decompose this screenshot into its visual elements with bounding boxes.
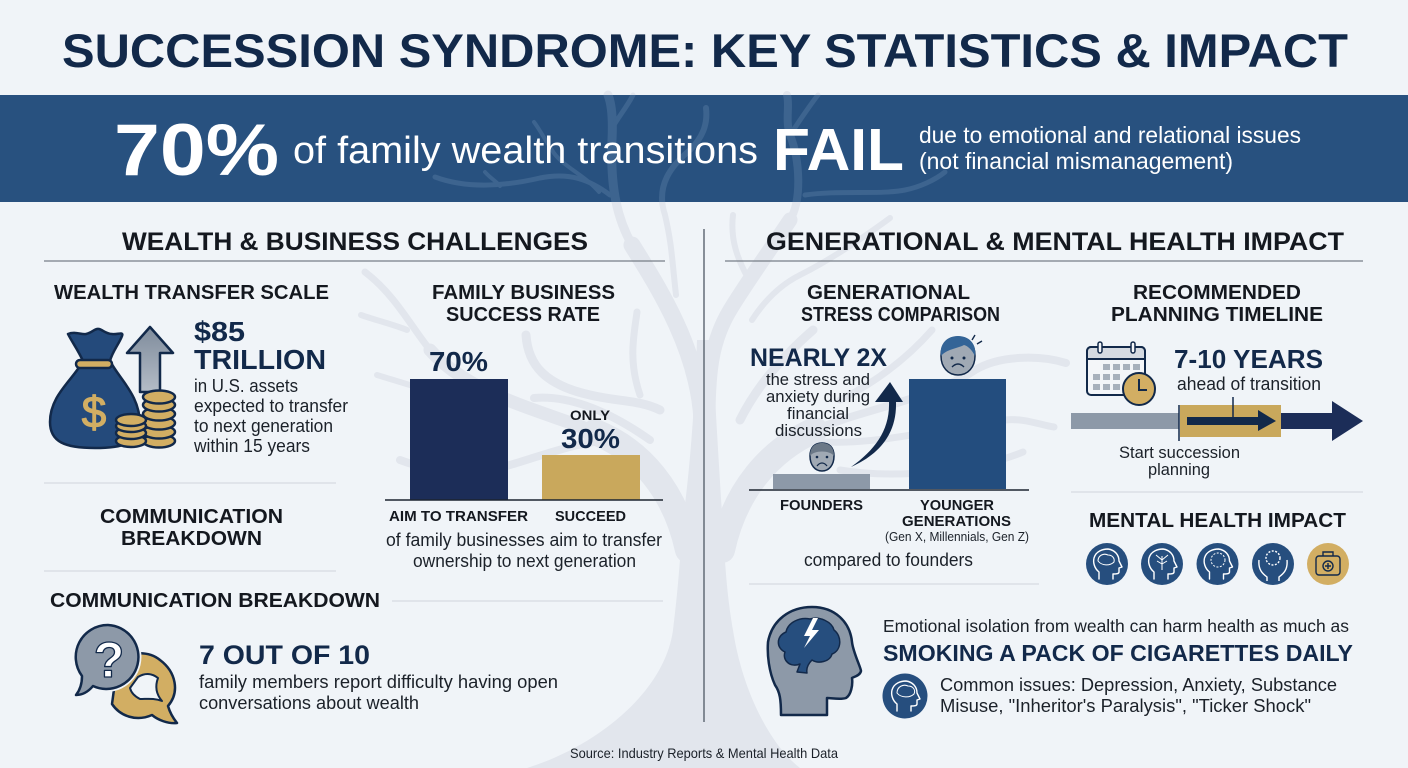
text: ahead of transition: ahead of transition xyxy=(1177,374,1321,394)
banner: headline statistic: of family wealth transitions xyxy=(293,130,758,172)
bar chart: success rate: SUCCEED xyxy=(555,508,626,525)
text: common issues xyxy=(940,675,1337,716)
text: stress description: discussions xyxy=(775,421,862,440)
heading: communication breakdown: COMMUNICATION BREAKDOWN xyxy=(50,590,380,612)
text: start succession planning: planning xyxy=(1148,460,1210,479)
statistic: 7 out of 10: 7 OUT OF 10 xyxy=(199,640,370,670)
banner: headline statistic: FAIL xyxy=(773,117,904,183)
text: communication description: family members report difficulty having open xyxy=(199,672,558,692)
text: chart caption xyxy=(386,530,662,571)
icon: calendar and clock xyxy=(1087,342,1155,405)
text: emotional isolation: Emotional isolation from wealth can harm health as much as xyxy=(883,616,1349,636)
heading: wealth transfer scale: WEALTH TRANSFER SCALE xyxy=(54,282,329,304)
text: asset transfer description: expected to transfer xyxy=(194,396,348,416)
text: common issues: Common issues: Depression, Anxiety, Substance xyxy=(940,675,1337,695)
bar chart: stress levels xyxy=(749,335,1029,544)
heading: generational stress comparison: GENERATIONAL xyxy=(807,282,970,304)
timeline arrow xyxy=(1071,397,1363,441)
background tree illustration xyxy=(361,95,1066,768)
icon: first aid kit xyxy=(1307,543,1349,585)
heading: recommended planning timeline: RECOMMENDED xyxy=(1133,282,1301,304)
statistic: smoking a pack: SMOKING A PACK OF CIGARETTES DAILY xyxy=(883,640,1353,666)
panel: generational stress comparison: STRESS COMPARISON xyxy=(801,304,1000,326)
heading: family business success rate: FAMILY BUSINESS xyxy=(432,282,615,304)
bar chart: stress levels: YOUNGER xyxy=(920,497,994,514)
banner: headline statistic: due to emotional and relational issues xyxy=(919,122,1301,148)
heading: mental health impact: MENTAL HEALTH IMPACT xyxy=(1089,510,1346,532)
icon: money bag with coins and arrow: $ xyxy=(82,388,106,437)
text: chart caption: ownership to next generation xyxy=(413,551,636,571)
text: communication description xyxy=(199,672,558,713)
bar chart: stress levels: (Gen X, Millennials, Gen Z) xyxy=(885,529,1029,544)
heading: wealth and business challenges: WEALTH & BUSINESS CHALLENGES xyxy=(122,228,588,256)
bar chart: success rate: AIM TO TRANSFER xyxy=(389,508,528,525)
panel: emotional isolation xyxy=(768,607,1353,718)
text: stress description: financial xyxy=(787,404,849,423)
panel: communication breakdown xyxy=(50,590,663,723)
panel: wealth transfer scale xyxy=(50,282,348,456)
bar chart: stress levels: FOUNDERS xyxy=(780,497,863,514)
icon: head with brain xyxy=(1086,543,1128,585)
title: SUCCESSION SYNDROME: KEY STATISTICS & IMPACT xyxy=(62,24,1348,77)
statistic: 7-10 years: 7-10 YEARS xyxy=(1174,344,1323,374)
text: compared to founders: compared to founders xyxy=(804,550,973,570)
panel: recommended planning timeline: PLANNING TIMELINE xyxy=(1111,304,1323,326)
heading: communication breakdown label xyxy=(100,506,283,550)
icon: hands with gear xyxy=(1252,543,1294,585)
bar chart: stress levels: GENERATIONS xyxy=(902,513,1011,530)
text: common issues: Misuse, "Inheritor's Paralysis", "Ticker Shock" xyxy=(940,696,1311,716)
heading: communication breakdown label: COMMUNICATION xyxy=(100,506,283,528)
panel: wealth transfer scale: TRILLION xyxy=(194,344,326,375)
icon: brain badge xyxy=(882,674,928,718)
arrow: upward curve xyxy=(851,382,903,467)
text: asset transfer description: in U.S. assets xyxy=(194,376,298,396)
icon: speech bubbles xyxy=(76,625,177,723)
icon: younger generation face xyxy=(941,335,982,375)
text: stress description: anxiety during xyxy=(766,387,870,406)
text: communication description: conversations about wealth xyxy=(199,693,419,713)
heading: generational and mental health impact: GENERATIONAL & MENTAL HEALTH IMPACT xyxy=(766,228,1344,256)
banner: headline statistic: (not financial mismanagement) xyxy=(919,148,1233,174)
text: start succession planning xyxy=(1119,443,1240,479)
source note: Source: Industry Reports & Mental Health Data xyxy=(570,745,838,761)
heading: communication breakdown label: BREAKDOWN xyxy=(121,528,262,550)
panel: generational stress comparison xyxy=(749,282,1029,570)
text: asset transfer description: within 15 years xyxy=(193,436,310,456)
bar chart: success rate: ONLY xyxy=(570,407,611,423)
panel: family business success rate: SUCCESS RATE xyxy=(446,304,600,326)
text: stress description xyxy=(766,370,870,440)
banner: headline statistic: 70% xyxy=(114,110,279,191)
icon: speech bubbles: ? xyxy=(94,632,124,688)
text: chart caption: of family businesses aim to transfer xyxy=(386,530,662,550)
icon: head with network xyxy=(1196,543,1238,585)
icon: head with tree xyxy=(1141,543,1183,585)
text: asset transfer description: to next generation xyxy=(194,416,333,436)
text: start succession planning: Start succession xyxy=(1119,443,1240,462)
text: asset transfer description xyxy=(193,376,348,456)
statistic: nearly 2x: NEARLY 2X xyxy=(750,344,887,372)
icon: money bag with coins and arrow xyxy=(50,327,175,448)
icon: founder face xyxy=(810,443,834,471)
panel: mental health impact icons xyxy=(1086,510,1349,585)
bar chart: success rate xyxy=(385,346,663,525)
banner: headline statistic xyxy=(0,95,1408,202)
bar chart: success rate: 70% xyxy=(429,346,488,377)
icon: head with brain and lightning xyxy=(768,607,861,715)
panel: family business success rate xyxy=(385,282,663,571)
bar chart: success rate: 30% xyxy=(561,423,620,454)
statistic: 85 trillion: $85 xyxy=(194,316,245,347)
panel: recommended planning timeline xyxy=(1071,282,1363,479)
text: stress description: the stress and xyxy=(766,370,870,389)
